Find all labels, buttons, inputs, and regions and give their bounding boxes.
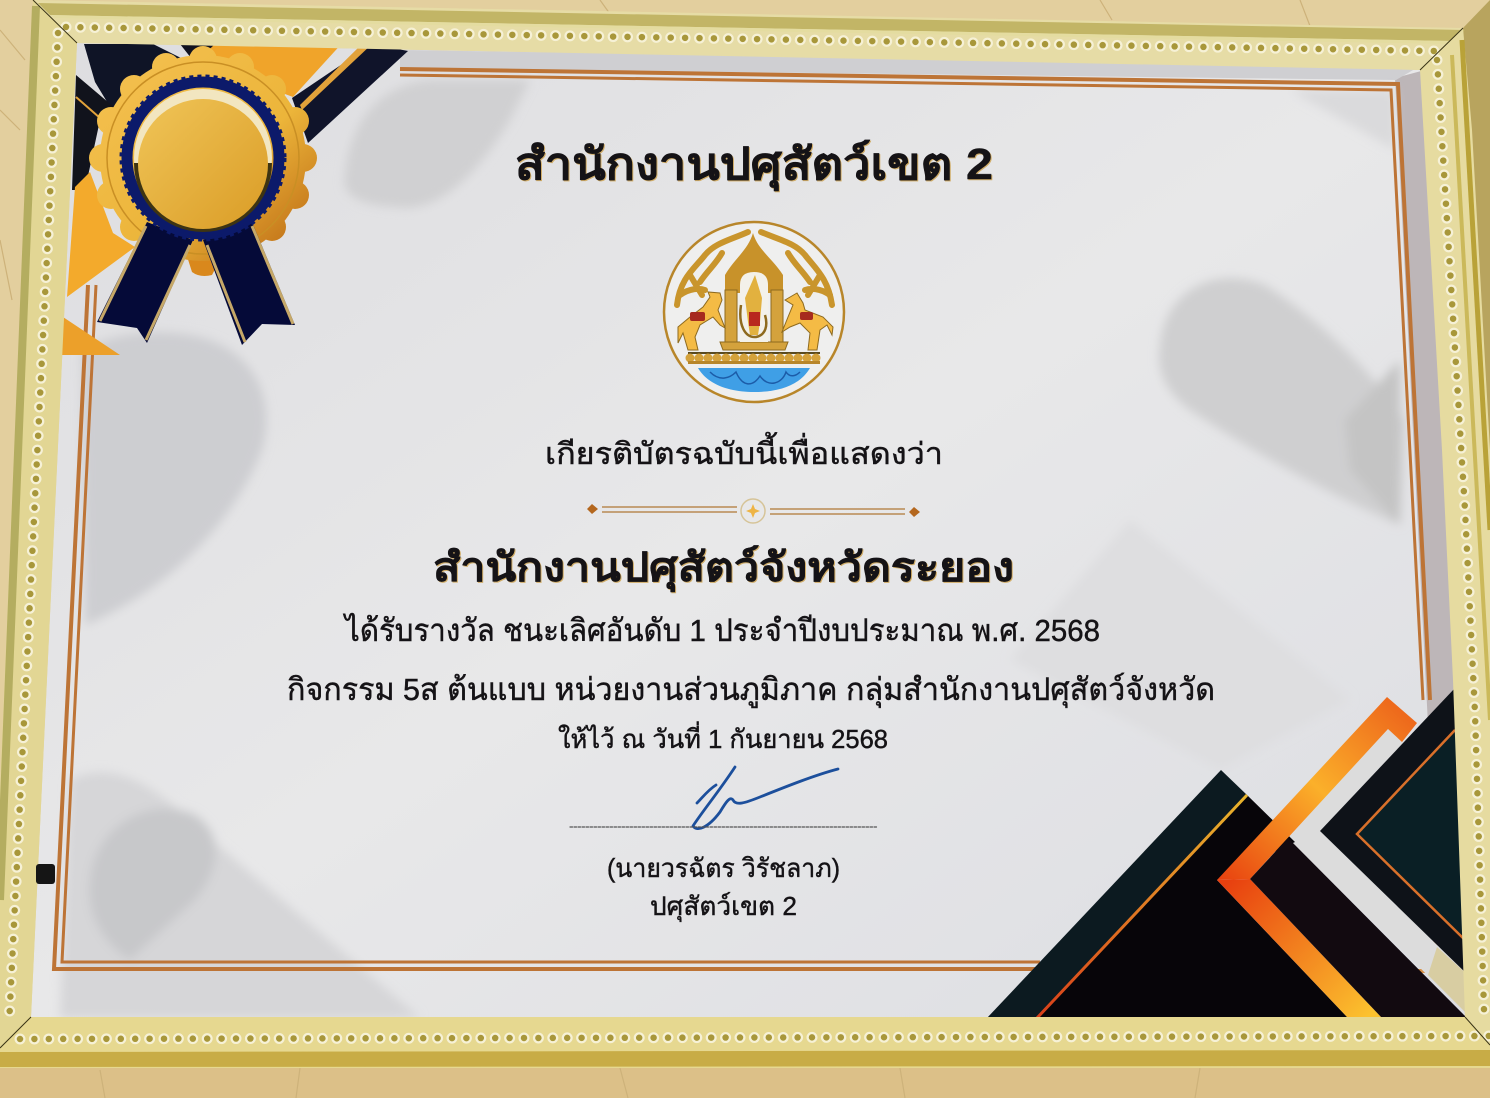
deity figure (745, 275, 762, 335)
certificate line: เกียรติบัตรฉบับนี้เพื่อแสดงว่า (545, 432, 943, 471)
frame left rail (0, 0, 77, 1048)
scalloped seal (89, 46, 317, 262)
frame top rail (33, 0, 1465, 70)
clip mark (36, 864, 55, 884)
signature (570, 767, 877, 829)
lotus base (688, 352, 820, 364)
title: สำนักงานปศุสัตว์เขต 2 (515, 139, 993, 192)
water clouds (698, 368, 810, 392)
navy ring (127, 82, 279, 234)
icon: department emblem (664, 222, 844, 402)
frame right rail (1420, 28, 1490, 1048)
left ribbon (97, 222, 193, 343)
award line: ได้รับรางวัล ชนะเลิศอันดับ 1 ประจำปีงบประมาณ พ.ศ. 2568 (342, 613, 1100, 648)
recipient name: สำนักงานปศุสัตว์จังหวัดระยอง (433, 545, 1014, 593)
badge back tab (185, 250, 225, 276)
top left corner shapes (58, 40, 408, 355)
left animal (678, 292, 725, 350)
bottom right corner shapes (987, 688, 1470, 1018)
ornamental divider (587, 499, 920, 523)
activity line: กิจกรรม 5ส ต้นแบบ หน่วยงานส่วนภูมิภาค กลุ่มสำนักงานปศุสัตว์จังหวัด (287, 672, 1215, 709)
orange double border (54, 69, 1438, 971)
ornamental flames right (761, 232, 832, 305)
right animal (782, 293, 833, 350)
paper shadow shapes (60, 80, 1405, 1018)
shaded margin on right (1395, 70, 1470, 1017)
icon: gold medal with ribbons (89, 46, 317, 345)
signer title: ปศุสัตว์เขต 2 (650, 891, 797, 922)
ornamental flames left (677, 232, 832, 305)
frame bottom rail (0, 1017, 1490, 1068)
date line: ให้ไว้ ณ วันที่ 1 กันยายน 2568 (558, 721, 888, 754)
right ribbon (203, 222, 295, 345)
shrine (720, 233, 788, 350)
signer name: (นายวรฉัตร วิรัชลาภ) (607, 853, 840, 883)
gold disc (138, 99, 268, 229)
